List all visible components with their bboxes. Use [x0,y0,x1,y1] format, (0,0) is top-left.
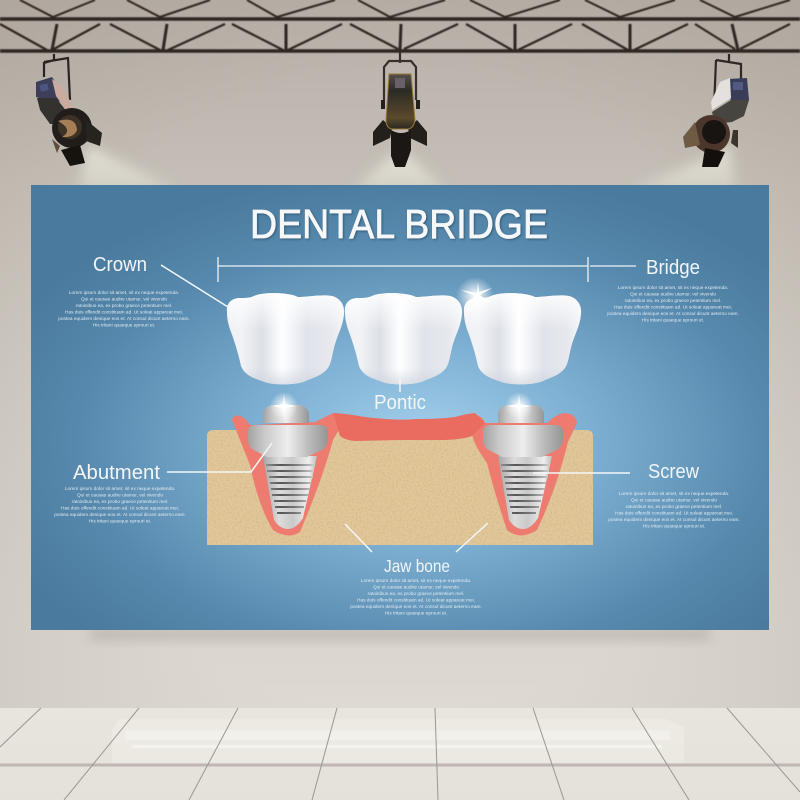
spotlight: centre [373,52,427,167]
screw threads [263,456,317,529]
sparkle: left abutment [270,392,298,420]
text block: bridge: postea equidem denique eos et. At consul dicunt aeterno eam. [607,311,739,317]
shadow under poster [90,628,710,640]
sparkle: crown [456,277,494,315]
text block: crown: Qui et causae audire utamur, vel vivendo [81,296,167,302]
text block: jaw bone: Lorem ipsum dolor sit amet, sit ex neque expetenda. [361,578,471,584]
crown: right tooth [464,293,581,384]
text block: screw: Qui et causae audire utamur, vel vivendo [631,498,717,504]
gum: right socket [472,413,577,536]
text block: abutment: ratoinibus ea, ex probo graece petentium mel. [72,499,168,505]
label: Screw: Screw [648,461,700,483]
text block: crown [58,290,190,328]
text block: jaw bone: Qui et causae audire utamur, vel vivendo [373,584,459,590]
label: Jaw bone: Jaw bone [384,556,450,576]
gum: left socket [232,413,343,536]
implant: left [248,405,328,529]
text block: screw: postea equidem denique eos et. At consul dicunt aeterno eam. [608,517,740,523]
right screw threads [498,456,552,529]
text block: jaw bone: Has duis offendit constituam ad. Ut soleat appareat mei, [357,598,475,604]
title: DENTAL BRIDGE [250,201,548,247]
text block: screw [608,491,740,530]
text block: abutment: Qui et causae audire utamur, vel vivendo [77,492,163,498]
text block: crown: Has duis offendit constituam ad. Ut soleat appareat mei, [65,310,183,316]
label: Abutment: Abutment [73,462,160,484]
spotlight: right [683,54,749,167]
text block: bridge: His tritani quaeque eprouri et. [642,318,704,324]
implant: right [483,405,563,529]
text block: bridge: ratoinibus ea, ex probo graece petentium mel. [625,298,721,304]
label: Crown: Crown [93,254,147,276]
text block: jaw bone [350,578,482,616]
text block: bridge [607,285,739,324]
text block: screw: Has duis offendit constituam ad. Ut soleat appareat mei, [615,510,733,516]
floor [0,708,800,800]
gum strip joining sockets [333,413,485,441]
abutment cap [263,405,309,423]
abutment collar [248,425,328,457]
jaw bone block [207,430,593,545]
poster panel [31,185,769,630]
spotlight: left [36,54,102,166]
text block: bridge: Qui et causae audire utamur, vel vivendo [630,292,716,298]
label: Bridge: Bridge [646,257,700,279]
text block: crown: Lorem ipsum dolor sit amet, sit ex neque expetenda. [69,290,179,296]
light beams [78,145,735,190]
crown: left tooth [227,293,344,384]
text block: jaw bone: His tritani quaeque eprouri et. [385,610,447,616]
text block: abutment: postea equidem denique eos et. At consul dicunt aeterno eam. [54,512,186,518]
right abutment collar [483,425,563,457]
text block: screw: His tritani quaeque eprouri et. [643,524,705,530]
text block: abutment: Lorem ipsum dolor sit amet, sit ex neque expetenda. [65,486,175,492]
label: Pontic: Pontic [374,392,426,414]
sparkle: right abutment [505,392,533,420]
text block: crown: postea equidem denique eos et. At consul dicunt aeterno eam. [58,316,190,322]
floor bench reflection [112,719,684,763]
text block: bridge: Lorem ipsum dolor sit amet, sit ex neque expetenda. [618,285,728,291]
text block: screw: Lorem ipsum dolor sit amet, sit ex neque expetenda. [619,491,729,497]
leader lines [161,265,630,552]
text block: bridge: Has duis offendit constituam ad. Ut soleat appareat mei, [614,304,732,310]
bridge span bracket [218,257,636,282]
right abutment cap [498,405,544,423]
text block: jaw bone: postea equidem denique eos et. At consul dicunt aeterno eam. [350,604,482,610]
crown: pontic tooth [345,293,462,384]
text block: abutment [54,486,186,524]
text block: jaw bone: ratoinibus ea, ex probo graece petentium mel. [368,591,464,597]
text block: crown: ratoinibus ea, ex probo graece petentium mel. [76,303,172,309]
lighting truss [0,0,800,51]
text block: abutment: Has duis offendit constituam ad. Ut soleat appareat mei, [61,506,179,512]
text block: screw: ratoinibus ea, ex probo graece petentium mel. [626,504,722,510]
text block: crown: His tritani quaeque eprouri et. [93,322,155,328]
text block: abutment: His tritani quaeque eprouri et. [89,518,151,524]
